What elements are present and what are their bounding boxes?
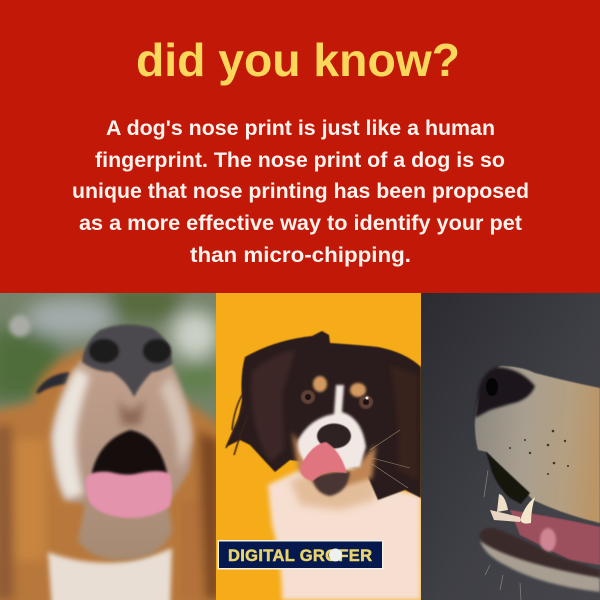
mouth interior [486, 452, 530, 504]
text block: nose print fact: unique that nose printing has been proposed [72, 180, 529, 203]
tongue [300, 442, 347, 481]
logo badge: Digital Grofer [218, 540, 384, 570]
text block: nose print fact: A dog's nose print is just like a human [106, 117, 495, 140]
whiskers [370, 430, 410, 488]
text block: nose print fact: than micro-chipping. [190, 244, 411, 267]
eyes [301, 390, 315, 404]
white blaze [298, 385, 366, 470]
beagle head fur [0, 350, 225, 600]
text block: nose print fact: as a more effective way to identify your pet [79, 212, 522, 235]
beagle nose [82, 324, 172, 397]
chest [48, 548, 172, 600]
chin [312, 472, 350, 496]
text block: nose print fact: fingerprint. The nose print of a dog is so [95, 149, 505, 172]
beagle white muzzle [52, 360, 192, 560]
tan cheeks [292, 432, 376, 492]
teeth [497, 494, 508, 512]
beagle tongue [86, 471, 172, 518]
lower jaw [480, 541, 600, 592]
panel: beagle photo [0, 285, 225, 600]
panel: yellow background dog photo [216, 293, 421, 600]
nose [475, 367, 535, 418]
panel: dog profile photo on dark background [421, 293, 600, 600]
title: did you know? [136, 34, 460, 86]
logo badge: Digital Grofer: DIGITAL GROFER [228, 547, 372, 565]
ear wisps [226, 395, 248, 455]
tan eyebrows [313, 376, 327, 392]
lower lip [479, 528, 600, 578]
gums [510, 510, 600, 565]
panel: red header background [0, 0, 600, 293]
text block: nose print fact [72, 117, 529, 267]
dark head and ears [226, 331, 421, 500]
beagle eye [36, 372, 70, 394]
logo magnifier dot [329, 548, 342, 562]
whisker freckles [509, 430, 569, 475]
chest fur [268, 470, 421, 600]
whiskers [484, 470, 521, 600]
dog muzzle [475, 366, 600, 523]
beagle mouth [92, 430, 167, 482]
nose [317, 424, 351, 448]
